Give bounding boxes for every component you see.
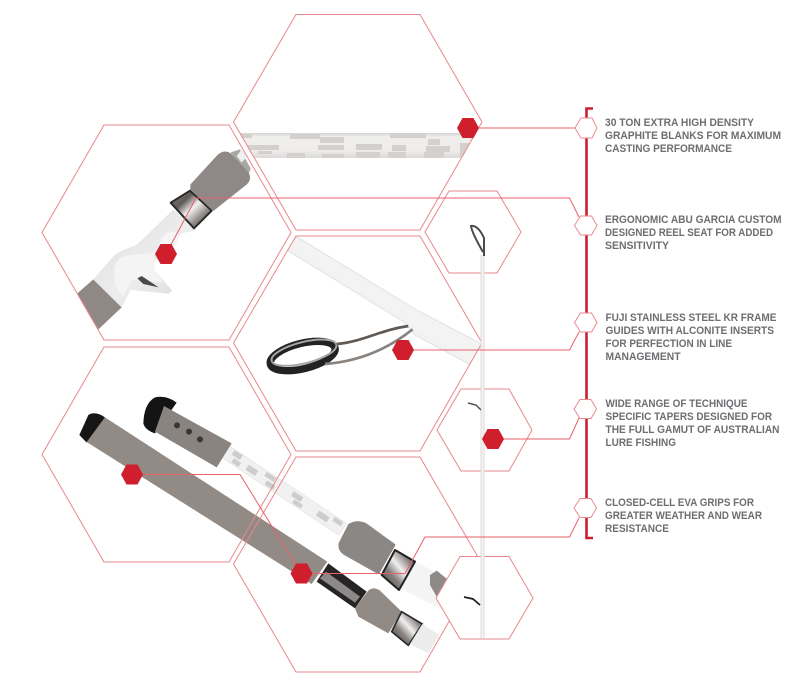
text: reel seat: ERGONOMIC ABU GARCIA CUSTOM: [605, 214, 782, 226]
node 1: [575, 118, 597, 138]
mid guide: [468, 403, 481, 410]
text: tapers: WIDE RANGE OF TECHNIQUE: [606, 398, 748, 410]
connector 2: [166, 198, 579, 254]
text: reel seat: DESIGNED REEL SEAT FOR ADDED: [605, 227, 773, 239]
photo: grips, carbon section and ferrules: [317, 523, 448, 653]
text: grips: [605, 497, 762, 535]
photo: guide close-up: [267, 237, 482, 376]
taupe lower grip: [355, 588, 402, 633]
connector 3: [403, 332, 579, 350]
marker 3: [392, 340, 414, 360]
metal ferrule: [171, 191, 212, 228]
text: reel seat: SENSITIVITY: [605, 240, 669, 252]
guide ring: [267, 336, 338, 376]
small hexagon: rod tip: [425, 191, 521, 273]
hexagon: fore grips: [234, 457, 482, 672]
node 5: [574, 498, 596, 518]
marker 6: [290, 564, 312, 584]
spine nodes: [574, 118, 597, 518]
text: guides: [606, 312, 777, 363]
red spine bracket: [586, 108, 593, 538]
foam fore grip: [192, 153, 249, 209]
long grip: [87, 417, 327, 584]
white reel seat body: [93, 209, 197, 307]
node 2: [574, 216, 597, 235]
hexagon: rear grip: [42, 347, 291, 562]
text: reel seat: [605, 214, 782, 252]
marker 4: [482, 429, 504, 449]
connector 1: [468, 127, 576, 129]
text: grips: RESISTANCE: [605, 523, 669, 535]
connector 4: [493, 418, 579, 439]
small hexagon: mid rod: [437, 389, 532, 471]
patterned blank: [222, 446, 347, 535]
text: tapers: LURE FISHING: [606, 437, 676, 449]
text: tapers: [606, 398, 780, 449]
text: blanks: GRAPHITE BLANKS FOR MAXIMUM: [605, 130, 781, 142]
text: guides: GUIDES WITH ALCONITE INSERTS: [606, 325, 774, 337]
white blank lower: [410, 624, 439, 653]
red markers: [121, 118, 504, 584]
butt cap short: [143, 397, 177, 433]
node 3: [574, 313, 597, 332]
text: grips: GREATER WEATHER AND WEAR: [605, 510, 762, 522]
text: guides: FUJI STAINLESS STEEL KR FRAME: [606, 312, 777, 324]
hexagon: guide: [234, 236, 482, 451]
ferrule upper: [382, 550, 415, 590]
ferrule lower: [392, 612, 422, 645]
white blank: [287, 237, 482, 365]
full rod, vertical: [464, 226, 484, 638]
foam upper grip: [340, 523, 394, 573]
small hexagon: lower rod: [436, 556, 533, 639]
rod tip guide: [471, 226, 484, 256]
seat thumb recess: [156, 228, 182, 253]
connector lines: [132, 128, 579, 574]
guide frame: [337, 326, 408, 344]
rear grip section: [77, 279, 122, 329]
text: tapers: SPECIFIC TAPERS DESIGNED FOR: [606, 411, 772, 423]
trigger slot: [137, 276, 159, 287]
node 4: [574, 400, 596, 418]
butt cap long: [79, 413, 105, 443]
marker 2: [155, 244, 177, 264]
short grey butt grip: [155, 406, 232, 467]
blank stub: [231, 149, 251, 175]
text: guides: MANAGEMENT: [606, 351, 681, 363]
text: grips: CLOSED-CELL EVA GRIPS FOR: [605, 497, 754, 509]
photo: long rear grip and butt caps: [79, 397, 347, 584]
carbon section: [317, 563, 367, 608]
large hexagon outlines: [42, 14, 482, 672]
text: blanks: [605, 117, 781, 155]
hexagon: reel seat: [42, 125, 291, 340]
text: guides: FOR PERFECTION IN LINE: [606, 338, 732, 350]
photo: graphite blank close-up: [233, 133, 478, 158]
white blank upper: [398, 562, 448, 612]
marker 1: [457, 118, 479, 138]
marker 5: [121, 464, 143, 484]
photo: reel seat and fore grip: [77, 149, 251, 329]
seat highlight: [114, 253, 163, 297]
hexagon: graphite blank: [234, 14, 482, 230]
text: blanks: CASTING PERFORMANCE: [605, 143, 732, 155]
lower guide: [464, 597, 480, 605]
connector 5: [132, 474, 579, 574]
text: tapers: THE FULL GAMUT OF AUSTRALIAN: [606, 424, 780, 436]
text: blanks: 30 TON EXTRA HIGH DENSITY: [605, 117, 754, 129]
